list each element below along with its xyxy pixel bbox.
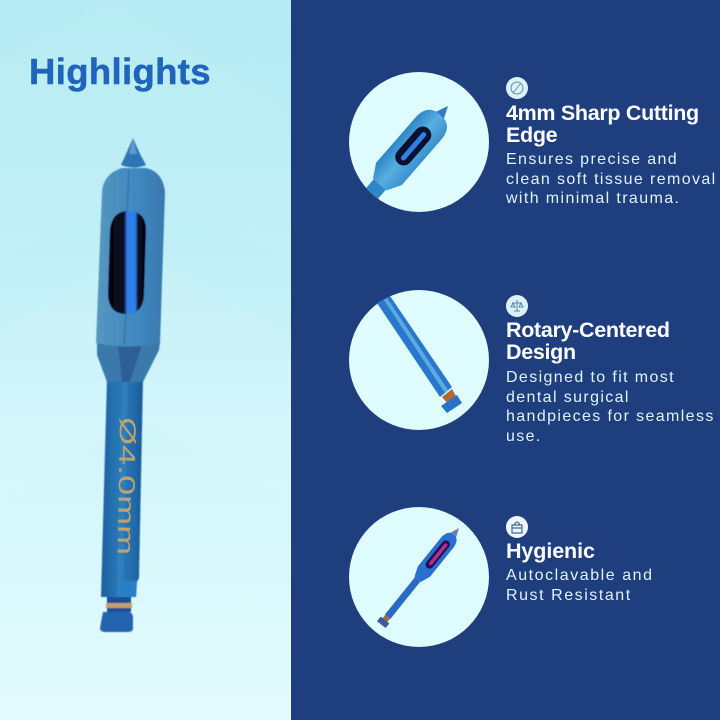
title: Highlights (29, 51, 211, 92)
circle 1: cutting edge detail (349, 72, 489, 212)
circle 2: rotary shank detail (349, 290, 489, 430)
text: feature 3 description: Rust Resistant (506, 587, 632, 604)
icon: feature 2 badge (506, 295, 528, 317)
text: feature 1 description: clean soft tissue removal (506, 171, 717, 188)
main product image: blue tissue punch (96, 138, 166, 633)
text: feature 2 description: handpieces for seamless (506, 408, 715, 425)
heading: 4mm Sharp Cutting Edge (506, 101, 699, 147)
slot window (108, 211, 146, 314)
panel: left light background (0, 0, 291, 720)
body (96, 168, 165, 346)
collar and head (100, 597, 133, 632)
heading: Rotary-Centered Design: Rotary-Centered (506, 318, 670, 342)
text: feature 2 description: dental surgical (506, 389, 630, 406)
heading: Rotary-Centered Design: Design (506, 340, 576, 364)
neck taper (97, 343, 160, 382)
text: feature 2 description (506, 369, 715, 445)
icon: feature 3 badge (506, 516, 528, 538)
text: feature 3 description: Autoclavable and (506, 567, 654, 584)
icon: feature 1 badge (506, 77, 528, 99)
tip (121, 138, 146, 168)
heading: Hygienic: Hygienic (506, 539, 595, 563)
text: feature 1 description: Ensures precise and (506, 151, 678, 168)
text: feature 1 description: with minimal trauma. (506, 190, 680, 207)
heading: 4mm Sharp Cutting Edge: 4mm Sharp Cutting (506, 101, 699, 125)
heading: Rotary-Centered Design (506, 318, 670, 364)
text: feature 3 description (506, 567, 654, 604)
text: feature 1 description (506, 151, 717, 207)
shaft (101, 378, 143, 597)
text: feature 2 description: Designed to fit most (506, 369, 675, 386)
heading: 4mm Sharp Cutting Edge: Edge (506, 123, 557, 147)
panel: right navy background (291, 0, 720, 720)
circle 3: full instrument view (349, 507, 489, 647)
engraved size text: Ø4.0mm (113, 417, 141, 555)
text: feature 2 description: use. (506, 428, 542, 445)
